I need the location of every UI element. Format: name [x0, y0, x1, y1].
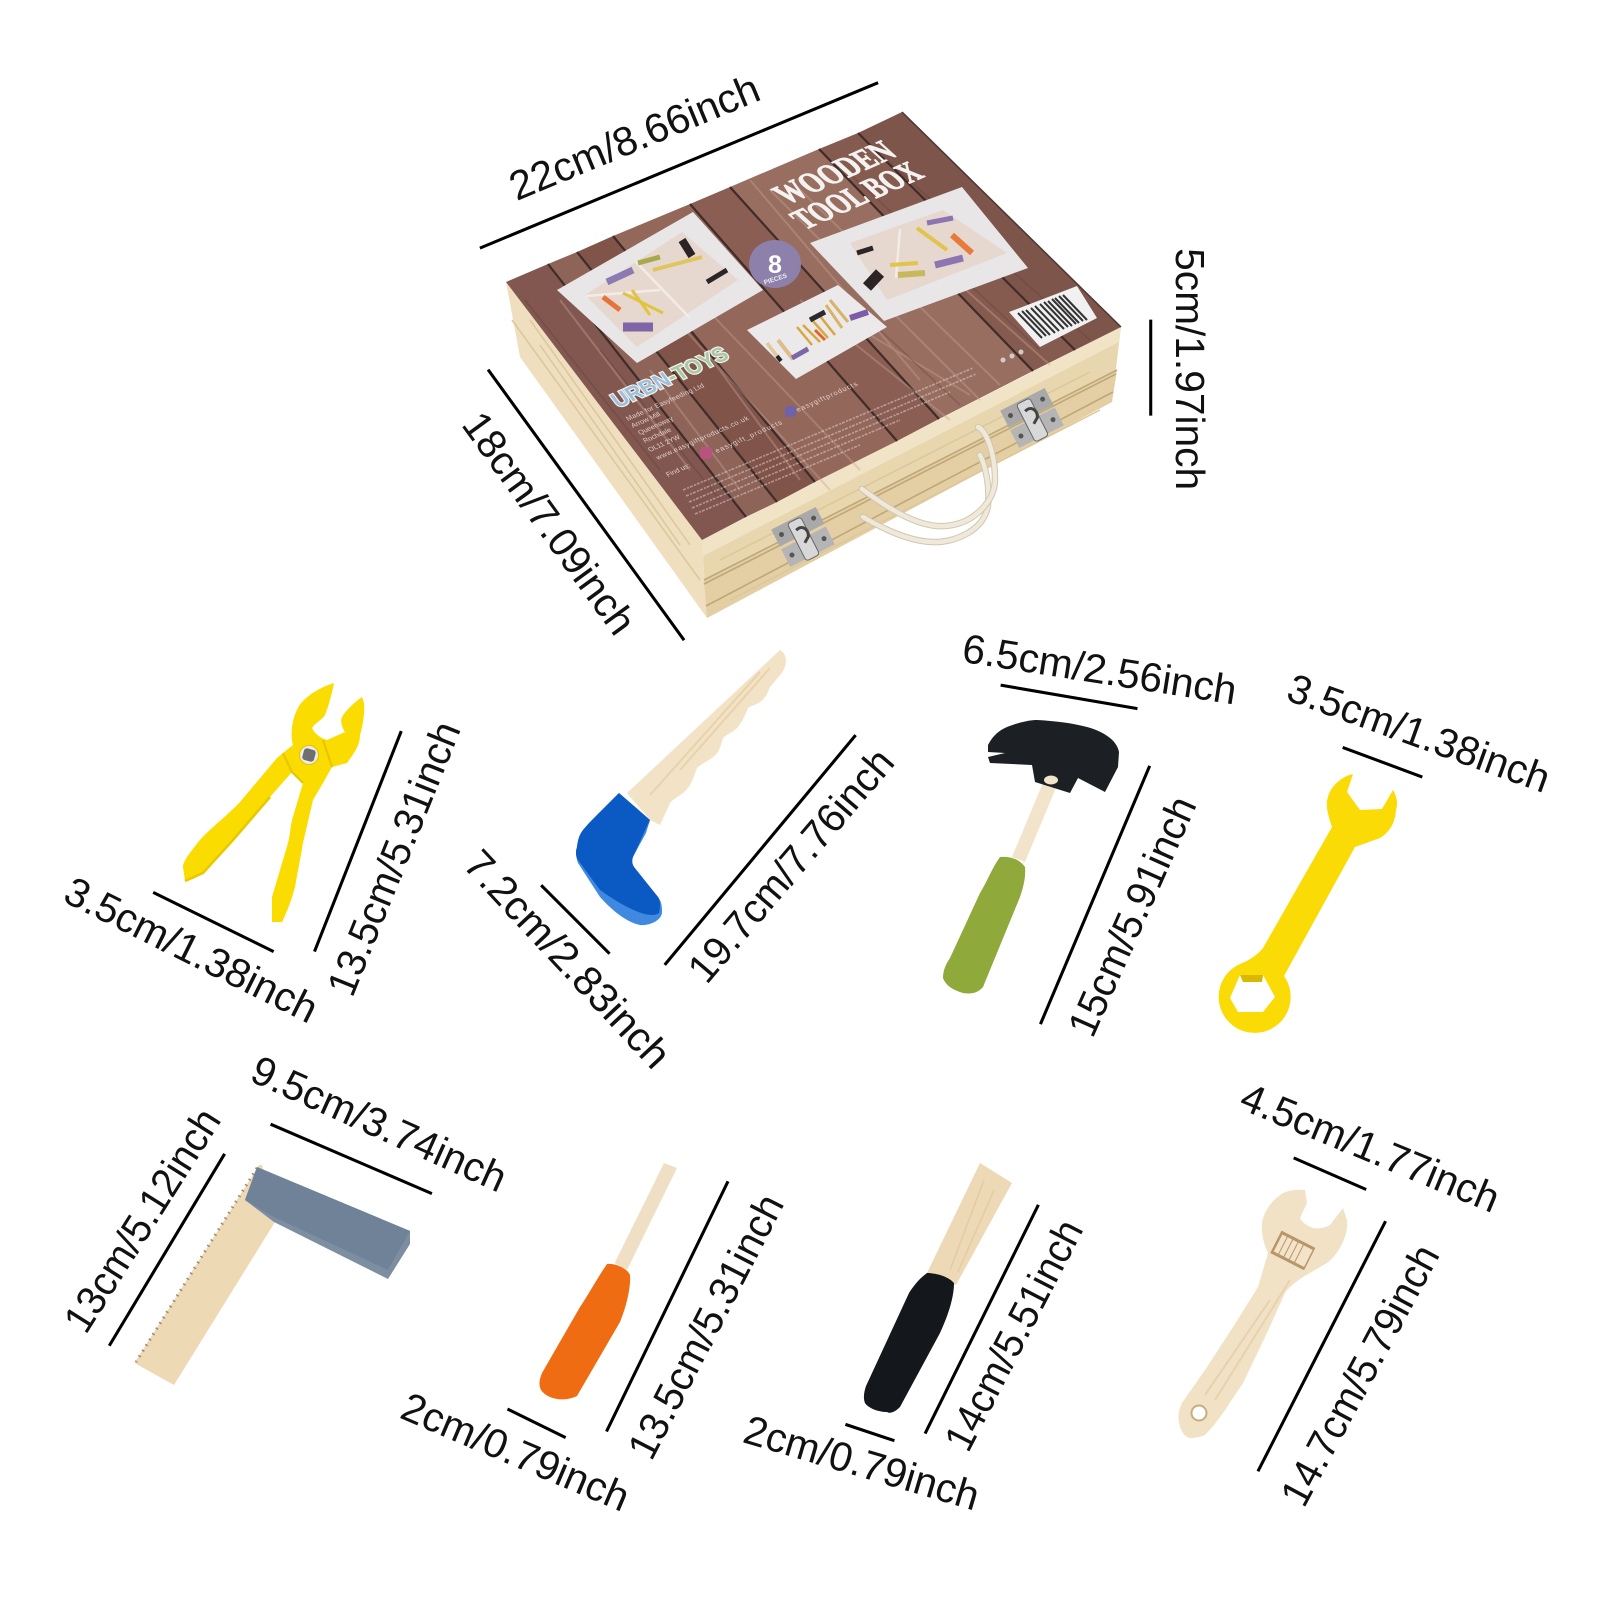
contact text: Rochdale — [642, 427, 673, 445]
dim: wrench width: 3.5cm/1.38inch — [1281, 665, 1556, 802]
dim: saw length: 19.7cm/7.76inch — [678, 739, 903, 991]
dim: screwdriver length: 13.5cm/5.31inch — [619, 1187, 793, 1466]
tool: saw — [576, 650, 786, 925]
contact text: OL11 2YW — [647, 434, 682, 454]
dim: box length — [480, 65, 878, 248]
photo panel left — [557, 212, 763, 363]
barcode — [1009, 286, 1097, 347]
latch left — [771, 507, 836, 569]
photo panel right — [810, 187, 1028, 321]
dim: box height: 5cm/1.97inch — [1167, 248, 1213, 490]
wooden tool box — [506, 112, 1121, 618]
social icons — [700, 406, 796, 459]
dim: square width: 9.5cm/3.74inch — [244, 1047, 514, 1201]
box title: TOOL BOX — [782, 156, 932, 235]
pieces badge — [749, 240, 801, 288]
contact text: Find us: — [665, 463, 692, 479]
tool: carpenter square — [134, 1165, 410, 1385]
box front side — [702, 327, 1121, 618]
dim: box width: 18cm/7.09inch — [453, 403, 645, 643]
adjustment screw — [1270, 1231, 1315, 1270]
tool: black chisel — [864, 1163, 1012, 1413]
dim: chisel width: 2cm/0.79inch — [739, 1406, 985, 1519]
contact text: easygiftproducts — [795, 381, 860, 414]
dim: pliers length: 13.5cm/5.31inch — [318, 715, 470, 1002]
box left side — [506, 282, 707, 618]
contact text: www.easygiftproducts.co.uk — [654, 415, 751, 462]
tool: adjustable wrench — [1178, 1190, 1347, 1438]
fine print — [683, 368, 976, 514]
tool: pliers — [183, 683, 364, 922]
dim: hammer width: 6.5cm/2.56inch — [959, 625, 1240, 713]
dim: adjustable wrench length: 14.7cm/5.79inch — [1271, 1237, 1448, 1513]
contact text — [625, 381, 860, 479]
dim: saw width: 7.2cm/2.83inch — [455, 841, 680, 1077]
pieces badge: PIECES — [763, 272, 789, 287]
dim: chisel length: 14cm/5.51inch — [935, 1212, 1092, 1458]
dim: box length: 22cm/8.66inch — [502, 65, 766, 209]
brand logo: URBN-TOYS — [606, 342, 733, 412]
pieces badge: 8 — [768, 251, 782, 279]
dim: pliers width: 3.5cm/1.38inch — [57, 867, 325, 1032]
dim: screwdriver width: 2cm/0.79inch — [395, 1383, 636, 1520]
rope handle — [862, 427, 995, 542]
tool: open-end wrench — [1219, 774, 1397, 1033]
dim: hammer length: 15cm/5.91inch — [1059, 789, 1205, 1043]
compliance symbols — [1000, 350, 1024, 362]
box title: WOODEN — [764, 135, 904, 210]
contact text: Arrow Mill — [630, 411, 663, 430]
tool: orange screwdriver — [539, 1163, 677, 1399]
box lid printed top — [506, 112, 1121, 540]
dim: square length: 13cm/5.12inch — [54, 1100, 230, 1340]
dim: adjustable wrench width: 4.5cm/1.77inch — [1234, 1074, 1506, 1222]
contact text: easygift_products — [714, 420, 784, 455]
tool: hammer — [943, 720, 1119, 993]
contact text: Made for Easyfeeding Ltd — [625, 383, 706, 423]
latch right — [1000, 388, 1065, 450]
photo panel tools — [747, 285, 887, 379]
contact text: Queensway — [637, 416, 675, 437]
